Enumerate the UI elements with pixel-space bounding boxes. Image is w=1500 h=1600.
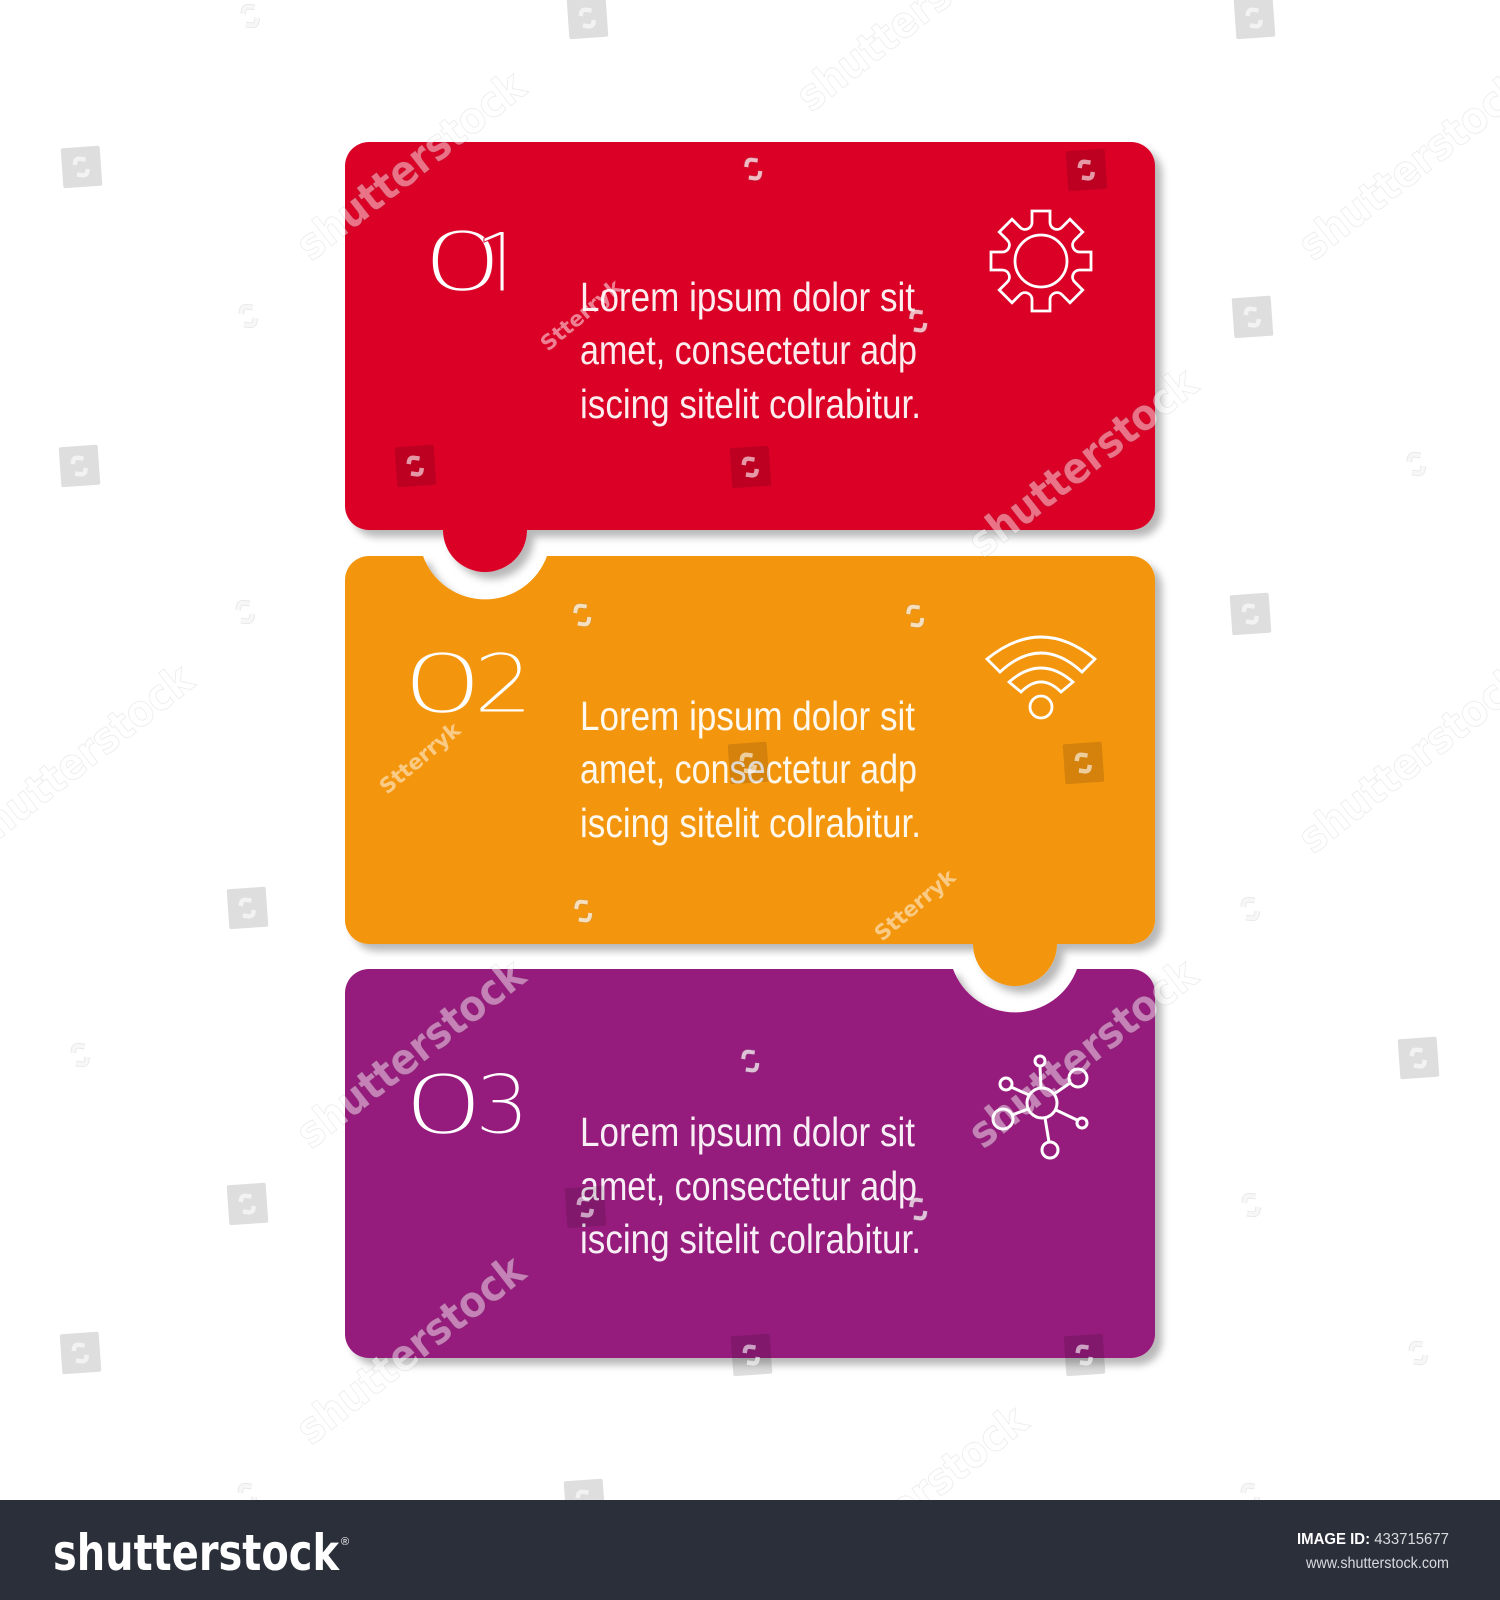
footer logo wordmark: shutterstock bbox=[53, 1524, 340, 1582]
number 03 bbox=[401, 1058, 530, 1153]
watermark: contributor signatures: Stterryk bbox=[375, 717, 466, 799]
card 2: orange panel with connector tab bbox=[345, 556, 1155, 986]
footer site url: www.shutterstock.com bbox=[1305, 1555, 1449, 1572]
text block: card 2: amet, consectetur adp bbox=[580, 746, 917, 792]
number 03: 3 bbox=[475, 1058, 530, 1152]
text block: card 3: amet, consectetur adp bbox=[580, 1163, 917, 1209]
watermark: contributor signatures bbox=[375, 274, 961, 946]
text block: card 1 bbox=[580, 274, 921, 427]
number 02: 0 bbox=[400, 638, 486, 732]
text block: card 2 bbox=[580, 693, 921, 846]
text block: card 2: iscing sitelit colrabitur. bbox=[580, 800, 921, 846]
text block: card 3 bbox=[580, 1109, 921, 1262]
icon: network nodes bbox=[993, 1056, 1087, 1158]
watermark: contributor signatures: Stterryk bbox=[536, 274, 627, 356]
text block: card 3: Lorem ipsum dolor sit bbox=[580, 1109, 916, 1155]
number 01: 1 bbox=[475, 215, 527, 315]
watermark: diagonal wordmarks: shutterstock bbox=[287, 949, 536, 1159]
text block: card 3: iscing sitelit colrabitur. bbox=[580, 1216, 921, 1262]
number 01 bbox=[432, 230, 504, 291]
text block: card 1: amet, consectetur adp bbox=[580, 327, 917, 373]
watermark: diagonal wordmarks: shutterstock bbox=[959, 358, 1208, 568]
number 03: 0 bbox=[401, 1059, 487, 1153]
watermark: diagonal wordmarks: shutterstock bbox=[287, 61, 536, 271]
text block: card 2: Lorem ipsum dolor sit bbox=[580, 693, 916, 739]
number 02: 2 bbox=[473, 637, 534, 731]
text block: card 1: Lorem ipsum dolor sit bbox=[580, 274, 916, 320]
footer registered mark: ® bbox=[341, 1536, 349, 1548]
watermark: diagonal wordmarks: shutterstock bbox=[959, 949, 1208, 1159]
number 02 bbox=[400, 637, 534, 732]
footer image id: IMAGE ID: 433715677 bbox=[1297, 1531, 1449, 1548]
icon: gear bbox=[991, 211, 1091, 311]
card 3: purple panel bbox=[345, 969, 1155, 1358]
footer banner bbox=[0, 1500, 1500, 1600]
number 01: 0 bbox=[420, 216, 506, 310]
watermark: contributor signatures: Stterryk bbox=[870, 864, 961, 946]
watermark: diagonal wordmarks: shutterstock bbox=[789, 1395, 1038, 1600]
icon: wifi bbox=[987, 637, 1095, 718]
text block: card 1: iscing sitelit colrabitur. bbox=[580, 381, 921, 427]
card 1: red panel with connector tab bbox=[345, 142, 1155, 572]
watermark: diagonal wordmarks: shutterstock bbox=[287, 1245, 536, 1455]
